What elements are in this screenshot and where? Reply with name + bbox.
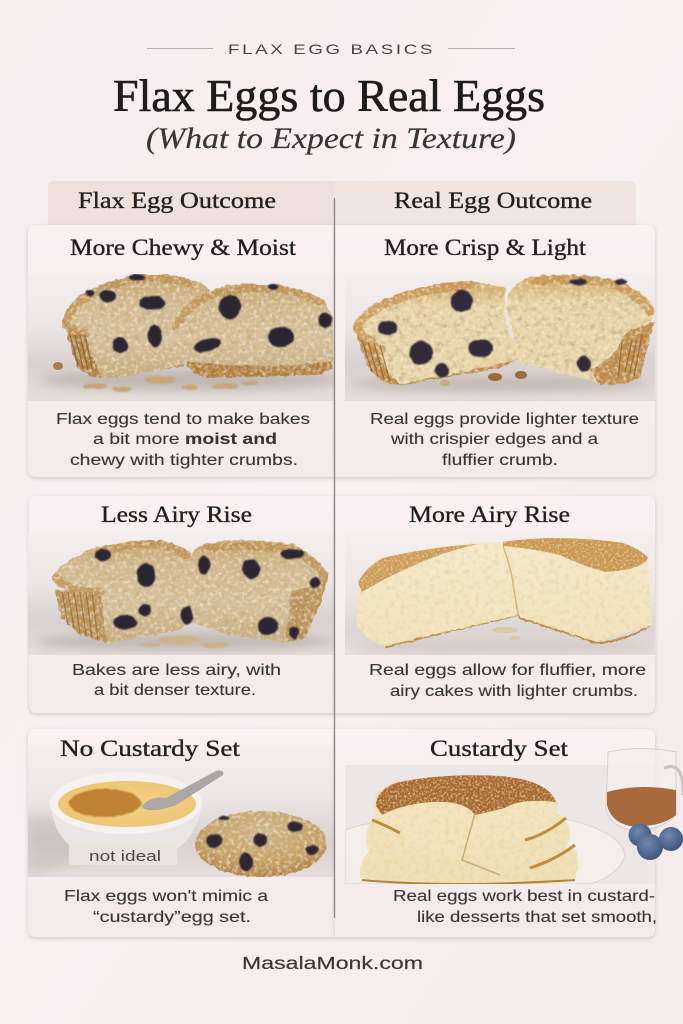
description (72, 662, 281, 699)
panel: more crisp and light (335, 225, 655, 477)
description: Real eggs allow for fluffier, more (369, 662, 646, 679)
footer: website: MasalaMonk.com (242, 953, 423, 973)
description: Real eggs work best in custard- (393, 888, 655, 905)
description (369, 662, 646, 700)
description: airy cakes with lighter crumbs. (390, 683, 638, 700)
panel: no custardy set (28, 729, 335, 937)
icon: syrup jug (606, 748, 683, 830)
photo: real egg muffin (345, 274, 655, 401)
label: not ideal (69, 845, 177, 865)
description: “custardy”egg set. (93, 909, 251, 926)
description: chewy with tighter crumbs. (70, 452, 298, 469)
description (370, 411, 639, 469)
description (56, 411, 310, 469)
heading: no custardy set: No Custardy Set (60, 736, 241, 761)
description: Flax eggs tend to make bakes (56, 411, 310, 428)
column header band (48, 181, 636, 225)
column header band: Flax Egg Outcome (78, 188, 276, 213)
photo: pancake stack (345, 748, 683, 884)
subtitle: (What to Expect in Texture) (146, 122, 516, 155)
description: a bit denser texture. (94, 682, 256, 699)
description (64, 888, 268, 926)
description (393, 888, 657, 926)
photo: airy cake (345, 533, 655, 655)
icon: cookie (195, 811, 327, 877)
icon: blueberries (628, 824, 683, 860)
column header band: Real Egg Outcome (394, 188, 592, 213)
description: a bit more moist and (93, 431, 277, 448)
heading: more chewy and moist: More Chewy & Moist (70, 235, 297, 260)
title: Flax Eggs to Real Eggs (113, 71, 545, 121)
photo: flax egg muffin (28, 274, 340, 401)
heading: more crisp and light: More Crisp & Light (384, 235, 587, 260)
panel: custardy set (335, 729, 683, 937)
heading: more airy rise: More Airy Rise (409, 502, 570, 527)
icon: pancakes (360, 775, 578, 884)
description: like desserts that set smooth, (417, 909, 657, 926)
panel: more chewy and moist (28, 225, 340, 477)
description: Bakes are less airy, with (72, 662, 281, 679)
photo: custard bowl and cookie (28, 770, 334, 877)
panel: less airy rise (28, 496, 335, 713)
icon: custard bowl (50, 770, 223, 856)
description: Real eggs provide lighter texture (370, 411, 639, 428)
description: fluffier crumb. (442, 452, 558, 469)
heading: less airy rise: Less Airy Rise (101, 502, 252, 527)
eyebrow: Flax Egg Basics: FLAX EGG BASICS (228, 41, 435, 57)
panel: more airy rise (335, 496, 655, 713)
description: Flax eggs won't mimic a (64, 888, 268, 905)
description: with crispier edges and a (390, 431, 598, 448)
photo: dense muffin (28, 533, 335, 655)
icon: plate (345, 814, 625, 884)
label: not ideal: not ideal (89, 848, 161, 865)
heading: custardy set: Custardy Set (430, 736, 569, 761)
